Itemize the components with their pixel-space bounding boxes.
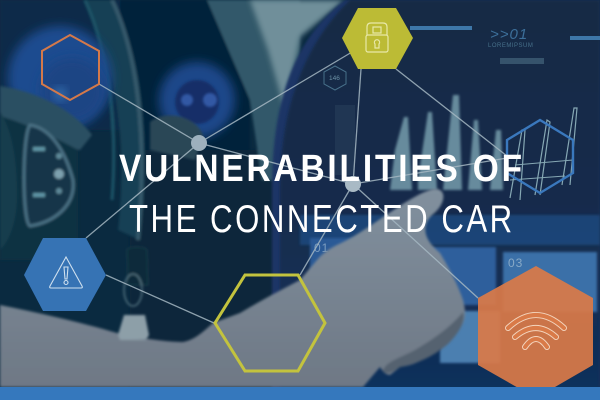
key fob [118,247,149,340]
dashboard screen: 01 [314,241,329,255]
hexagon with warning icon [24,238,106,311]
dashboard screen: 146 [329,75,340,82]
icon: padlock [366,23,388,52]
title [119,147,522,241]
HUD readout: >>01 [490,26,528,43]
hexagon outline: blue [507,120,573,193]
hexagon outline: yellow [215,275,325,371]
hexagon with wifi icon [478,266,593,398]
gauges [8,26,235,138]
icon: warning triangle [50,257,82,288]
steering wheel [0,86,203,260]
title line 1: VULNERABILITIES OF [119,147,522,189]
network node: left [191,135,207,151]
icon: wifi waves [508,315,564,347]
screen tiles [310,238,360,283]
arm and hand [0,189,465,387]
dashboard screen: LOREMIPSUM [488,43,533,49]
HUD badge [324,66,346,90]
connector lines [86,52,507,323]
hexagon with lock icon [342,8,413,69]
hexagon outline: orange [42,35,99,100]
screen chart spikes [390,95,503,190]
title line 2: THE CONNECTED CAR [129,198,512,241]
bottom blue band [0,387,600,400]
dashboard screen [272,0,600,400]
tile numbers: 03 [508,256,523,270]
instrument cluster hood [0,0,345,390]
network node: centre [345,176,361,192]
